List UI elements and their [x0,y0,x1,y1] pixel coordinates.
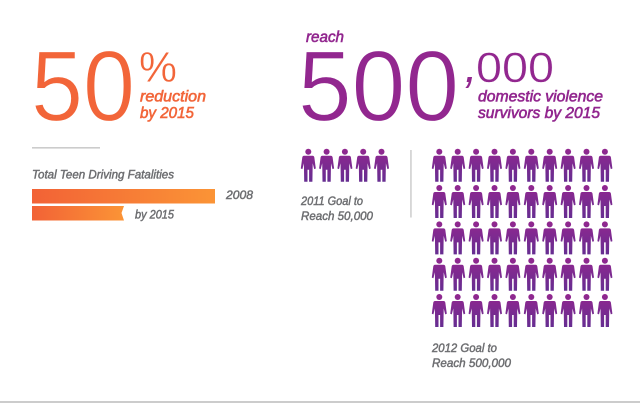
text: 2011 goal: Reach 50,000 [301,211,374,223]
people row 3 [432,221,612,254]
bar: 2008 [32,189,215,204]
label: by 2015: by 2015 [135,210,175,222]
text: 2012 goal: 2012 Goal to [431,343,498,355]
people row 4 [432,258,612,291]
text: reduction by 2015: by 2015 [140,105,194,122]
heading: 500,000 [298,30,554,142]
heading: 50%: % [139,44,177,92]
text: reduction by 2015 [140,88,206,122]
bar chart: fatalities [32,189,254,222]
text: 2011 goal: 2011 Goal to [300,196,364,208]
heading: 500,000: 000 [476,45,554,92]
text: domestic violence survivors by 2015: domestic violence [478,88,603,106]
label: 2008: 2008 [225,190,254,202]
people row 5 [432,294,612,327]
text: 2012 goal [431,343,512,370]
icons: 2012 people grid [432,149,612,327]
heading: 50%: 50 [31,30,135,142]
heading: 500,000: , [464,40,478,92]
text: reach: reach [306,29,344,46]
text: 2011 goal [300,196,374,223]
panel: survivors goal [298,29,612,370]
people row 1 [432,149,612,182]
heading: 500,000: 500 [298,30,459,142]
text: reduction by 2015: reduction [140,88,206,106]
bar: by 2015 [32,206,124,220]
people row 2 [432,185,612,218]
panel: teen driving goal [31,30,254,222]
text: domestic violence survivors by 2015 [478,88,603,122]
chart title: Total Teen Driving Fatalities [32,170,174,182]
icons: 2011 people row [301,149,389,182]
text: 2012 goal: Reach 500,000 [432,358,512,370]
text: domestic violence survivors by 2015: survivors by 2015 [478,105,600,122]
